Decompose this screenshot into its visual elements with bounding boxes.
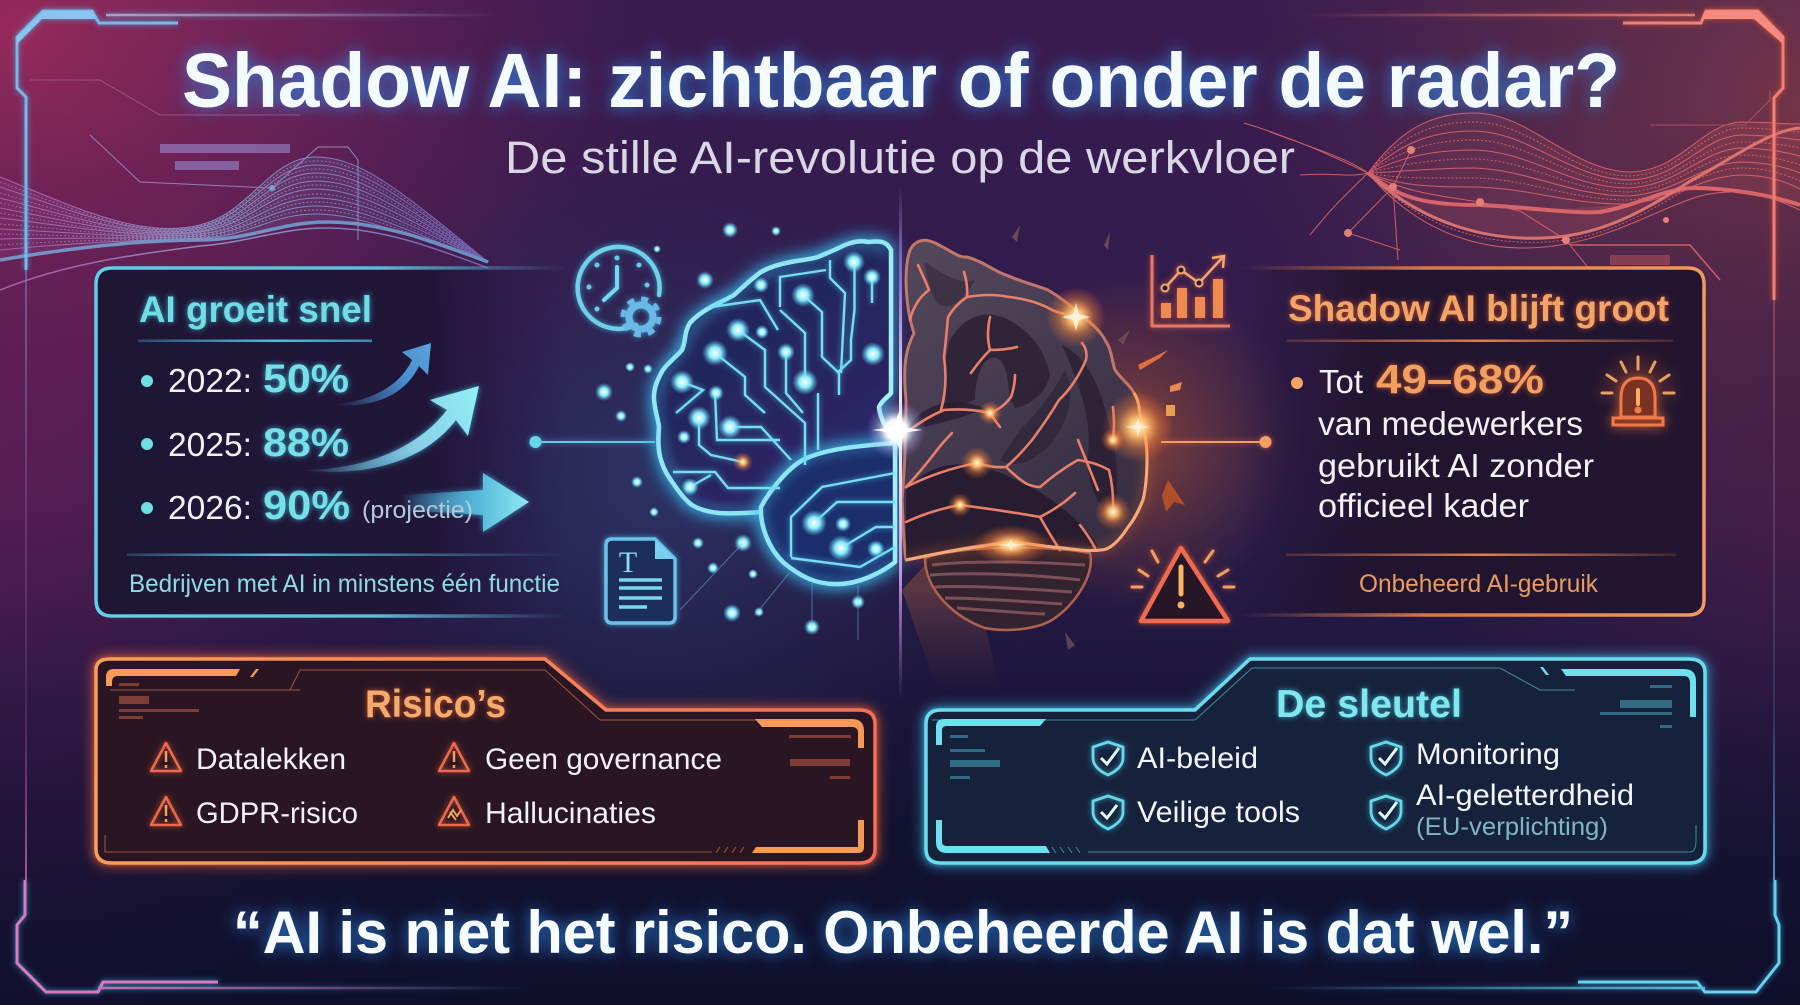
outer frame: top right corner xyxy=(1302,11,1783,300)
cerebellum xyxy=(925,548,1091,630)
spark stars xyxy=(996,303,1150,551)
brain mass xyxy=(902,240,1147,560)
subtitle: De stille AI-revolutie op de werkvloer xyxy=(505,132,1295,183)
risk: GDPR-risico: GDPR-risico xyxy=(196,797,358,830)
key: Monitoring: Monitoring xyxy=(1416,738,1560,771)
panel frame xyxy=(926,659,1705,863)
key: AI-beleid: AI-beleid xyxy=(1137,742,1258,775)
stat 2025: 2025: xyxy=(168,426,252,463)
arrow 2022 xyxy=(333,343,431,405)
brain outline temporal lobe xyxy=(761,443,895,584)
icon: document: T xyxy=(619,546,637,579)
key: Veilige tools: Veilige tools xyxy=(1137,796,1300,829)
decorative readouts xyxy=(119,683,851,779)
panel: Shadow AI blijft groot xyxy=(1240,268,1704,615)
bullet text xyxy=(1291,356,1594,524)
central flash xyxy=(866,400,926,460)
panel footnote: Onbeheerd AI-gebruik xyxy=(1359,570,1598,598)
bullet text: van medewerkers xyxy=(1318,405,1583,442)
sparks xyxy=(948,287,1174,565)
arrow 2026 xyxy=(404,473,529,532)
connector: right panel to brain xyxy=(1161,436,1272,448)
outer frame: top left corner xyxy=(17,11,500,270)
inner glow xyxy=(656,244,895,584)
frame accents xyxy=(106,669,864,853)
heading: De sleutel xyxy=(1276,683,1462,726)
particles around blue brain xyxy=(595,222,865,635)
closing quote: “AI is niet het risico. Onbeheerde AI is dat wel.” xyxy=(233,899,1573,966)
outer frame: bottom left corner xyxy=(17,880,528,992)
glowing lower edge xyxy=(906,393,1147,560)
circuit traces xyxy=(673,260,895,567)
risk: Datalekken: Datalekken xyxy=(196,743,346,776)
brain stem xyxy=(902,565,1000,690)
title: Shadow AI: zichtbaar of onder de radar? xyxy=(182,38,1620,124)
circuit nodes xyxy=(670,251,885,561)
stat 2022: 2022: xyxy=(168,362,252,399)
bullet text: 49–68% xyxy=(1376,356,1544,402)
veins xyxy=(906,265,1114,550)
outer frame: bottom right corner xyxy=(1270,880,1779,992)
brain: damaged dark half xyxy=(902,225,1185,690)
bullet text: Tot xyxy=(1319,363,1363,400)
bullet text: officieel kader xyxy=(1318,487,1529,524)
arrow 2025 xyxy=(301,386,479,472)
panel: De sleutel xyxy=(926,659,1705,863)
debris xyxy=(1012,225,1185,650)
heading: Risico’s xyxy=(365,683,506,726)
outer frame: left side xyxy=(25,270,27,880)
heading: AI groeit snel xyxy=(139,289,372,330)
center divider xyxy=(866,185,926,700)
key: Monitoring xyxy=(1371,738,1560,775)
projectie label: (projectie) xyxy=(362,497,473,524)
brain: blue circuit half xyxy=(654,241,895,584)
panel: AI groeit snel xyxy=(96,268,566,616)
panel outer glow xyxy=(926,659,1705,863)
icon: document xyxy=(606,539,675,623)
icon: bar chart xyxy=(1152,255,1230,326)
key: AI-geletterdheid: (EU-verplichting) xyxy=(1416,813,1608,841)
icon: clock with gear xyxy=(578,247,660,335)
stat 2022 xyxy=(141,357,349,401)
icon: alarm light xyxy=(1602,357,1674,425)
key: AI-geletterdheid xyxy=(1371,779,1634,841)
outer frame: right side xyxy=(1773,300,1775,880)
stat 2026: 2026: xyxy=(168,489,252,526)
connector: left panel to brain xyxy=(530,436,655,448)
decorative readouts xyxy=(950,685,1672,779)
panel outer glow xyxy=(96,659,875,863)
dark folds xyxy=(906,262,1117,558)
risk: Geen governance: Geen governance xyxy=(485,743,722,776)
icon: warning triangle xyxy=(1132,548,1234,621)
stat 2025 xyxy=(141,421,349,465)
panel: Risico's xyxy=(96,659,875,863)
risk: Hallucinaties: Hallucinaties xyxy=(485,797,656,830)
panel box xyxy=(1240,268,1704,615)
panel footnote: Bedrijven met AI in minstens één functie xyxy=(129,570,560,598)
panel frame xyxy=(96,659,875,863)
left data wave xyxy=(0,80,488,290)
bullet text: gebruikt AI zonder xyxy=(1318,447,1594,484)
stat 2026 xyxy=(141,482,350,528)
heading: Shadow AI blijft groot xyxy=(1288,288,1669,329)
frame accents xyxy=(936,667,1696,853)
stat 2026: 90% xyxy=(263,482,350,528)
stat 2025: 88% xyxy=(263,421,349,465)
particle links xyxy=(680,543,858,640)
brain outline upper xyxy=(654,241,895,513)
right data wave xyxy=(1244,90,1800,280)
pink node xyxy=(733,452,753,472)
key: AI-geletterdheid: AI-geletterdheid xyxy=(1416,779,1634,812)
stat 2022: 50% xyxy=(263,357,349,401)
panel box xyxy=(96,268,566,616)
